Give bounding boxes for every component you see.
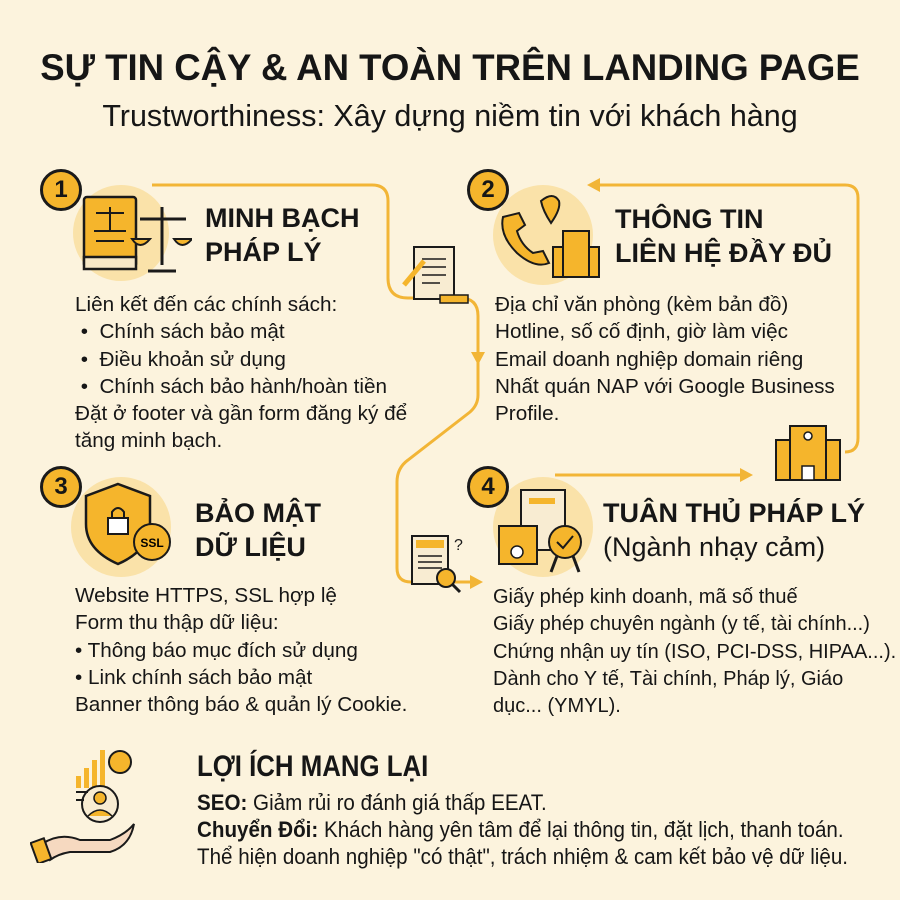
body text: Giấy phép kinh doanh, mã số thuế [493, 586, 798, 608]
body text: Địa chỉ văn phòng (kèm bản đồ) [495, 293, 788, 316]
icon: hand with user and chart [30, 750, 135, 863]
body text [493, 586, 896, 717]
heading: (Ngành nhạy cảm) [603, 532, 825, 562]
icon: office building [775, 425, 841, 481]
body text: Email doanh nghiệp domain riêng [495, 348, 803, 371]
icon: law book and scales [82, 196, 192, 272]
body text: Đặt ở footer và gần form đăng ký để [75, 402, 407, 425]
icon: document with magnifier [411, 535, 463, 593]
heading [603, 498, 865, 562]
body text: Profile. [495, 402, 559, 425]
heading: MINH BẠCH [205, 203, 360, 233]
body text: • Điều khoản sử dụng [81, 348, 286, 371]
badge 1: 1 [54, 176, 68, 203]
heading: LỢI ÍCH MANG LẠI [197, 750, 428, 783]
icon: phone, pin, building [501, 195, 600, 278]
panel 3 [40, 466, 407, 716]
body text: Website HTTPS, SSL hợp lệ [75, 584, 337, 607]
panel 4 [467, 466, 896, 717]
benefits section [30, 750, 848, 869]
body text: Banner thông báo & quản lý Cookie. [75, 693, 407, 716]
icon: certificates [498, 489, 582, 572]
badge 2 [467, 169, 509, 211]
panel 2 [467, 169, 835, 425]
heading: PHÁP LÝ [205, 237, 322, 267]
icon: shield lock SSL: SSL [140, 536, 164, 550]
body text [75, 584, 407, 716]
body text: dục... (YMYL). [493, 695, 621, 717]
body text: SEO: Giảm rủi ro đánh giá thấp EEAT. [197, 790, 547, 815]
badge 3 [40, 466, 82, 508]
body text: • Thông báo mục đích sử dụng [75, 639, 358, 662]
body text: • Link chính sách bảo mật [75, 666, 312, 689]
body text: Thể hiện doanh nghiệp "có thật", trách nhiệm & cam kết bảo vệ dữ liệu. [197, 844, 848, 869]
heading: BẢO MẬT [195, 498, 321, 528]
body text: tăng minh bạch. [75, 429, 222, 452]
badge 2: 2 [481, 176, 495, 203]
icon: document with magnifier: ? [454, 537, 463, 554]
body text: Chuyển Đổi: Khách hàng yên tâm để lại thông tin, đặt lịch, thanh toán. [197, 817, 844, 842]
icon: shield lock SSL [84, 482, 171, 566]
title: SỰ TIN CẬY & AN TOÀN TRÊN LANDING PAGE [40, 47, 860, 88]
subtitle: Trustworthiness: Xây dựng niềm tin với khách hàng [102, 99, 798, 133]
badge 1 [40, 169, 82, 211]
body text: Form thu thập dữ liệu: [75, 611, 279, 634]
badge 4 [467, 466, 509, 508]
badge 3: 3 [54, 473, 68, 500]
body text: Hotline, số cố định, giờ làm việc [495, 320, 788, 343]
body text [197, 790, 848, 869]
icon: contract document [402, 246, 469, 304]
body text: • Chính sách bảo mật [81, 320, 285, 343]
heading [615, 204, 832, 268]
heading: LIÊN HỆ ĐẦY ĐỦ [615, 238, 832, 268]
heading [205, 203, 360, 267]
badge 4: 4 [481, 473, 495, 500]
body text: • Chính sách bảo hành/hoàn tiền [81, 375, 387, 398]
body text: Nhất quán NAP với Google Business [495, 375, 835, 398]
heading: THÔNG TIN [615, 204, 764, 234]
body text: Chứng nhận uy tín (ISO, PCI-DSS, HIPAA...). [493, 641, 896, 663]
heading: TUÂN THỦ PHÁP LÝ [603, 498, 865, 528]
body text [75, 293, 407, 452]
body text: Dành cho Y tế, Tài chính, Pháp lý, Giáo [493, 668, 843, 690]
heading: DỮ LIỆU [195, 532, 306, 562]
body text: Giấy phép chuyên ngành (y tế, tài chính...) [493, 613, 870, 635]
panel 1 [40, 169, 407, 452]
body text [495, 293, 835, 425]
heading [195, 498, 321, 562]
body text: Liên kết đến các chính sách: [75, 293, 337, 316]
